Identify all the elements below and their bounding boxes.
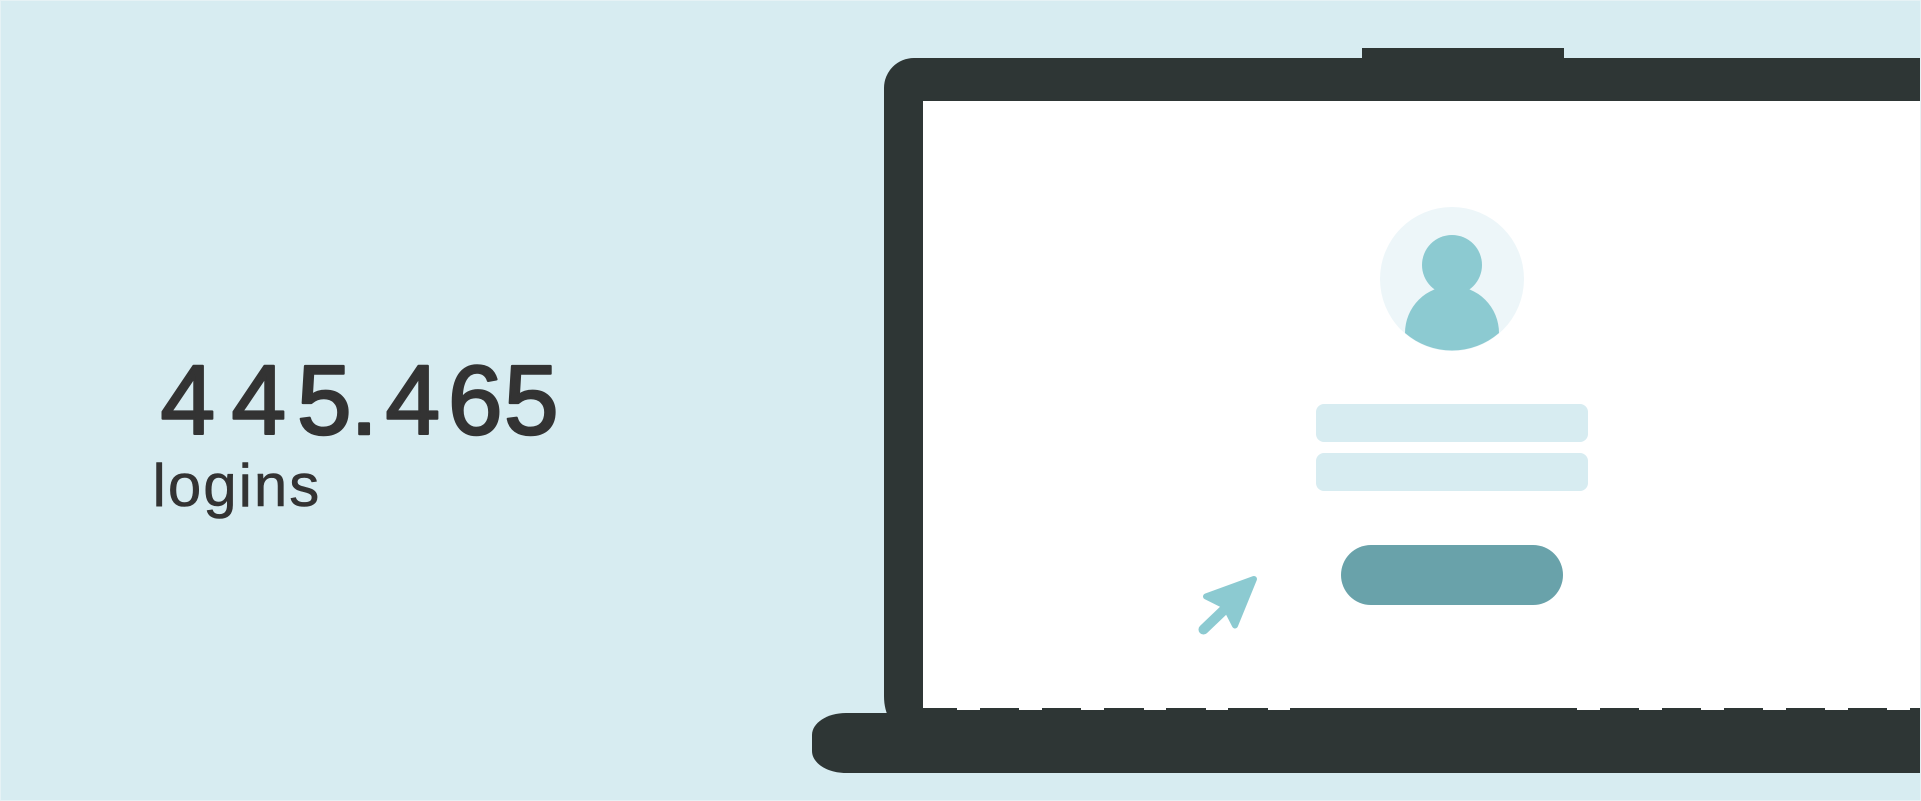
icon: user avatar (1380, 207, 1524, 351)
laptop: base (812, 713, 1920, 773)
login button (1341, 545, 1563, 605)
form field: password (1316, 453, 1588, 491)
laptop: lid frame (884, 48, 1920, 720)
laptop (812, 48, 1920, 773)
stat label: logins: logins (152, 452, 321, 519)
form field: username (1316, 404, 1588, 442)
stat: login count: 445.465 (160, 345, 559, 455)
icon: mouse cursor (1204, 579, 1254, 630)
laptop: screen (923, 101, 1920, 710)
